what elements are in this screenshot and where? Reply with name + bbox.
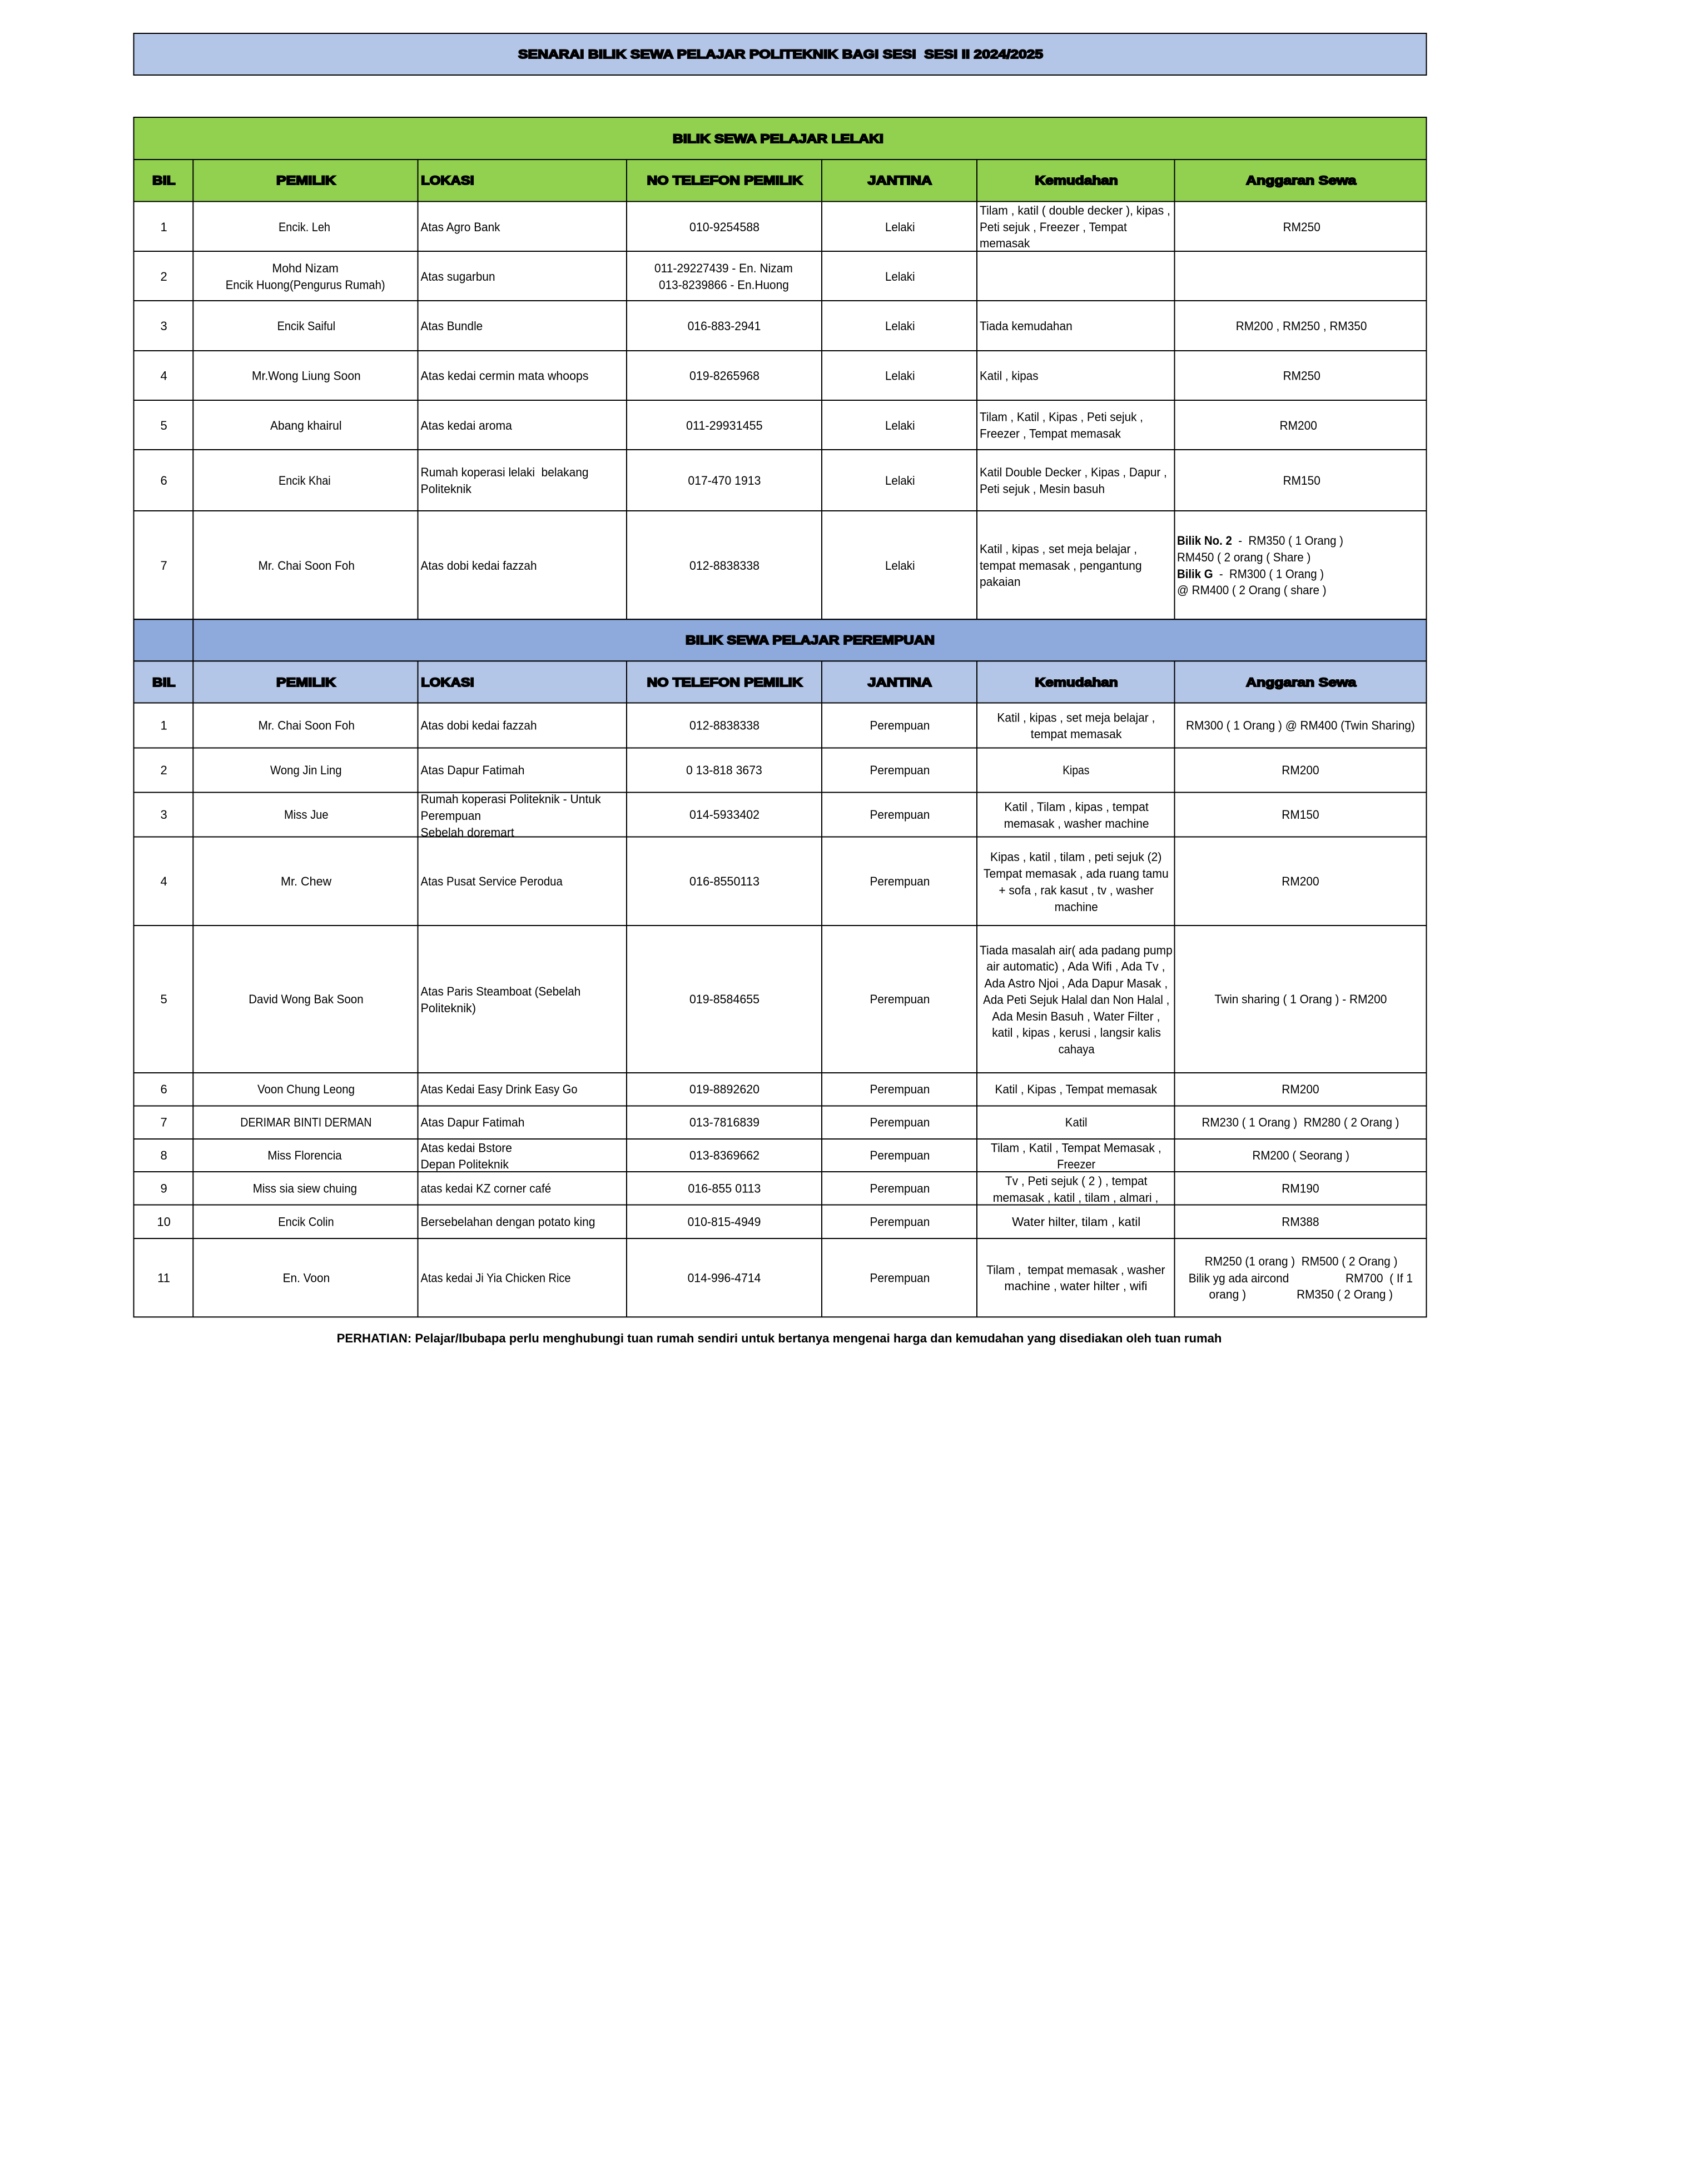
female table header row: Anggaran Sewa [1246, 675, 1357, 689]
female row 8: Depan Politeknik [420, 1157, 509, 1171]
female row 5: Perempuan [870, 992, 930, 1006]
male row 6 [133, 450, 1427, 511]
male row 7: Mr. Chai Soon Foh [259, 559, 355, 573]
female row 4: Perempuan [870, 874, 930, 888]
female row 3: Rumah koperasi Politeknik - Untuk [420, 792, 602, 806]
male row 7: Lelaki [885, 559, 915, 573]
female table header row: PEMILIK [276, 675, 336, 689]
male row 6: 017-470 1913 [688, 474, 761, 487]
female row 5: cahaya [1059, 1042, 1095, 1056]
female row 9: Miss sia siew chuing [253, 1182, 357, 1195]
female row 10: Perempuan [870, 1215, 930, 1228]
female row 2: Perempuan [870, 763, 930, 777]
female row 3: memasak , washer machine [1004, 817, 1149, 830]
male row 6: Peti sejuk , Mesin basuh [980, 482, 1105, 496]
female row 4: 016-8550113 [689, 874, 759, 888]
female row 10: Bersebelahan dengan potato king [420, 1215, 595, 1228]
male row 3: 3 [160, 319, 167, 333]
male row 2: 013-8239866 - En.Huong [659, 278, 789, 292]
heading: male section [133, 117, 1427, 160]
male row 3: RM200 , RM250 , RM350 [1236, 319, 1367, 333]
title [133, 33, 1427, 75]
female row 4: machine [1055, 900, 1098, 914]
female row 11: 11 [157, 1271, 170, 1285]
female table header row: NO TELEFON PEMILIK [647, 675, 803, 689]
male row 5: Freezer , Tempat memasak [980, 427, 1121, 440]
male row 7: 7 [160, 559, 167, 573]
female row 2: Kipas [1063, 763, 1089, 777]
male row 1: Tilam , katil ( double decker ), kipas , [980, 203, 1170, 217]
male row 2: Lelaki [885, 270, 915, 283]
male row 4 [133, 351, 1427, 400]
female table header row: BIL [152, 675, 176, 689]
female row 5: katil , kipas , kerusi , langsir kalis [992, 1026, 1161, 1039]
female row 5: 5 [160, 992, 167, 1006]
male row 1: Peti sejuk , Freezer , Tempat [980, 220, 1127, 234]
female row 5: air automatic) , Ada Wifi , Ada Tv , [986, 959, 1165, 973]
female row 4: 4 [160, 874, 167, 888]
panel: female student rooms table [133, 619, 1427, 1317]
male row 3 [133, 301, 1427, 351]
male row 5 [133, 400, 1427, 450]
male row 4: Mr.Wong Liung Soon [252, 369, 361, 382]
female row 4: Atas Pusat Service Perodua [420, 874, 563, 888]
male row 1: memasak [980, 236, 1030, 250]
male row 4: Lelaki [885, 369, 915, 382]
female row 8: 8 [160, 1148, 167, 1162]
female row 4 [133, 837, 1427, 926]
female row 10: Water hilter, tilam , katil [1012, 1215, 1140, 1228]
female row 1: 1 [160, 718, 167, 733]
female row 8: Freezer [1057, 1157, 1095, 1171]
title: SENARAI BILIK SEWA PELAJAR POLITEKNIK BAGI SESI SESI II 2024/2025 [518, 47, 1043, 61]
female row 2: 0 13-818 3673 [686, 763, 762, 777]
male table header row: Anggaran Sewa [1246, 173, 1357, 187]
female row 9 [133, 1172, 1427, 1205]
male row 5: Lelaki [885, 419, 915, 432]
female row 2: Atas Dapur Fatimah [420, 763, 524, 777]
female row 11: En. Voon [283, 1271, 330, 1285]
female row 1: Atas dobi kedai fazzah [420, 718, 537, 733]
female row 10: RM388 [1282, 1215, 1319, 1228]
male row 5: 011-29931455 [686, 419, 763, 432]
female row 4: + sofa , rak kasut , tv , washer [999, 883, 1154, 897]
male row 1: 1 [160, 220, 167, 234]
male row 2: 2 [160, 270, 167, 283]
male row 7: Bilik G - RM300 ( 1 Orang ) [1177, 567, 1324, 581]
female row 2: 2 [160, 763, 167, 777]
female row 3: Miss Jue [284, 808, 329, 822]
male table header row: BIL [152, 173, 176, 187]
female row 5: 019-8584655 [689, 992, 759, 1006]
male row 2: Mohd Nizam [272, 261, 339, 275]
male row 6: 6 [160, 474, 167, 487]
male row 5: 5 [160, 419, 167, 432]
female row 11: RM250 (1 orang ) RM500 ( 2 Orang ) [1205, 1254, 1398, 1268]
female row 6: 6 [160, 1082, 167, 1096]
footer note: PERHATIAN: Pelajar/Ibubapa perlu menghubungi tuan rumah sendiri untuk bertanya mengenai harga dan kemudahan yang disediakan oleh tuan rumah [337, 1331, 1222, 1345]
male row 5: Tilam , Katil , Kipas , Peti sejuk , [980, 410, 1143, 424]
female row 9: 016-855 0113 [688, 1182, 761, 1195]
female row 8: Tilam , Katil , Tempat Memasak , [991, 1141, 1161, 1155]
female row 7: Atas Dapur Fatimah [420, 1115, 524, 1130]
male row 7: tempat memasak , pengantung [980, 559, 1142, 573]
male row 4: 019-8265968 [689, 369, 759, 382]
female row 7: Perempuan [870, 1115, 930, 1130]
female row 7: Katil [1065, 1115, 1088, 1130]
female row 3: Katil , Tilam , kipas , tempat [1004, 800, 1149, 814]
female row 2 [133, 748, 1427, 793]
female row 5: Ada Astro Njoi , Ada Dapur Masak , [984, 976, 1168, 991]
female row 3: RM150 [1282, 808, 1319, 822]
female row 6: RM200 [1282, 1082, 1319, 1096]
female row 5: Twin sharing ( 1 Orang ) - RM200 [1214, 992, 1387, 1006]
female row 7: 7 [160, 1115, 167, 1130]
female row 11: machine , water hilter , wifi [1004, 1279, 1148, 1293]
heading: female section [133, 619, 1427, 661]
male row 3: 016-883-2941 [688, 319, 761, 333]
female row 3: Sebelah doremart [420, 825, 514, 839]
female table header row: JANTINA [868, 675, 932, 689]
female row 7 [133, 1106, 1427, 1139]
female row 10: 10 [157, 1215, 171, 1228]
male row 3: Tiada kemudahan [980, 319, 1073, 333]
female row 4: Tempat memasak , ada ruang tamu [984, 867, 1169, 880]
female row 7: DERIMAR BINTI DERMAN [240, 1115, 372, 1130]
female row 7: 013-7816839 [689, 1115, 759, 1130]
female table header row [133, 661, 1427, 703]
female row 9: RM190 [1282, 1182, 1319, 1195]
female row 4: Mr. Chew [281, 874, 331, 888]
female row 1: Katil , kipas , set meja belajar , [997, 710, 1155, 725]
male row 6: Lelaki [885, 474, 915, 487]
female row 3: 014-5933402 [689, 808, 759, 822]
female row 4: RM200 [1282, 874, 1319, 888]
female row 1: Perempuan [870, 718, 930, 733]
female row 5: David Wong Bak Soon [249, 992, 364, 1006]
male row 1: RM250 [1283, 220, 1320, 234]
male row 1: Atas Agro Bank [420, 220, 500, 234]
female row 6: Katil , Kipas , Tempat memasak [995, 1082, 1158, 1096]
female row 8: 013-8369662 [689, 1148, 759, 1162]
female row 8 [133, 1139, 1427, 1172]
female row 1: RM300 ( 1 Orang ) @ RM400 (Twin Sharing) [1186, 718, 1415, 733]
female row 9: Perempuan [870, 1182, 930, 1195]
male row 1: 010-9254588 [689, 220, 759, 234]
female row 5: Ada Mesin Basuh , Water Filter , [992, 1009, 1160, 1023]
female row 5: Atas Paris Steamboat (Sebelah [420, 984, 580, 998]
female row 5 [133, 926, 1427, 1073]
male row 2: Atas sugarbun [420, 270, 495, 283]
heading: male section: BILIK SEWA PELAJAR LELAKI [673, 132, 883, 146]
male row 7: Atas dobi kedai fazzah [420, 559, 537, 573]
male row 2: 011-29227439 - En. Nizam [654, 261, 793, 275]
female row 6 [133, 1073, 1427, 1106]
female row 11: 014-996-4714 [688, 1271, 761, 1285]
female row 9: 9 [160, 1182, 167, 1195]
female row 5: Ada Peti Sejuk Halal dan Non Halal , [983, 993, 1169, 1007]
female row 5: Tiada masalah air( ada padang pump [980, 943, 1173, 957]
female row 2: RM200 [1282, 763, 1319, 777]
male table header row: LOKASI [421, 173, 474, 187]
male row 5: Atas kedai aroma [420, 419, 513, 432]
female row 11: Tilam , tempat memasak , washer [986, 1263, 1165, 1277]
female row 11: orang ) [1209, 1287, 1246, 1301]
female row 11: RM350 ( 2 Orang ) [1297, 1287, 1393, 1301]
male row 6: Encik Khai [279, 474, 331, 487]
female row 6: Voon Chung Leong [257, 1082, 355, 1096]
male table header row: NO TELEFON PEMILIK [647, 173, 803, 187]
female row 11: Perempuan [870, 1271, 930, 1285]
female row 6: Atas Kedai Easy Drink Easy Go [420, 1082, 577, 1096]
female row 9: memasak , katil , tilam , almari , [993, 1191, 1158, 1205]
female row 9: atas kedai KZ corner café [420, 1182, 551, 1195]
female row 6: Perempuan [870, 1082, 930, 1096]
male row 5: Abang khairul [270, 419, 341, 432]
male row 7: pakaian [980, 575, 1021, 589]
female row 11: Atas kedai Ji Yia Chicken Rice [420, 1271, 570, 1285]
male table header row [133, 160, 1427, 201]
male row 2 [133, 251, 1427, 301]
male row 6: Katil Double Decker , Kipas , Dapur , [980, 465, 1167, 479]
female row 6: 019-8892620 [689, 1082, 759, 1096]
female row 8: Miss Florencia [267, 1148, 342, 1162]
female row 11 [133, 1238, 1427, 1317]
male row 3: Encik Saiful [277, 319, 335, 333]
male row 6: RM150 [1283, 474, 1320, 487]
male row 2: Encik Huong(Pengurus Rumah) [226, 278, 385, 292]
female row 2: Wong Jin Ling [270, 763, 341, 777]
female row 10 [133, 1205, 1427, 1238]
female row 4: Kipas , katil , tilam , peti sejuk (2) [990, 850, 1161, 864]
female row 8: Perempuan [870, 1148, 930, 1162]
male row 3: Atas Bundle [420, 319, 483, 333]
male table header row: PEMILIK [276, 173, 336, 187]
male row 7: 012-8838338 [689, 559, 759, 573]
female row 9: Tv , Peti sejuk ( 2 ) , tempat [1005, 1174, 1148, 1188]
female row 8: Atas kedai Bstore [420, 1141, 512, 1155]
female row 11: Bilik yg ada aircond [1189, 1271, 1289, 1285]
female row 5: Politeknik) [420, 1001, 476, 1015]
female row 11: RM700 ( If 1 [1346, 1271, 1413, 1285]
female row 10: Encik Colin [278, 1215, 334, 1228]
male row 4: 4 [160, 369, 167, 382]
male table header row: JANTINA [868, 173, 932, 187]
heading: female section: BILIK SEWA PELAJAR PEREMPUAN [686, 633, 935, 647]
male row 7: Bilik No. 2 - RM350 ( 1 Orang ) [1177, 534, 1343, 548]
male row 4: RM250 [1283, 369, 1320, 382]
male row 7: RM450 ( 2 orang ( Share ) [1177, 550, 1310, 564]
female table header row: Kemudahan [1035, 675, 1118, 689]
female row 3 [133, 792, 1427, 839]
female row 1: 012-8838338 [689, 718, 759, 733]
female row 3: 3 [160, 808, 167, 822]
female row 8: RM200 ( Seorang ) [1252, 1148, 1349, 1162]
male row 3: Lelaki [885, 319, 915, 333]
female row 10: 010-815-4949 [688, 1215, 761, 1228]
male row 5: RM200 [1280, 419, 1317, 432]
male row 6: Politeknik [420, 482, 472, 496]
panel: male student rooms table [133, 117, 1427, 619]
female row 1: Mr. Chai Soon Foh [259, 718, 355, 733]
male row 7 [133, 511, 1427, 619]
female table header row: LOKASI [421, 675, 474, 689]
female row 3: Perempuan [870, 808, 930, 822]
male row 7: @ RM400 ( 2 Orang ( share ) [1177, 583, 1327, 597]
male row 4: Atas kedai cermin mata whoops [420, 369, 588, 382]
male table header row: Kemudahan [1035, 173, 1118, 187]
male row 1: Lelaki [885, 220, 915, 234]
female row 3: Perempuan [420, 809, 481, 823]
female row 7: RM230 ( 1 Orang ) RM280 ( 2 Orang ) [1202, 1115, 1399, 1130]
male row 7: Katil , kipas , set meja belajar , [980, 542, 1137, 556]
male row 1: Encik. Leh [279, 220, 330, 234]
male row 6: Rumah koperasi lelaki belakang [420, 465, 588, 479]
male row 1 [133, 201, 1427, 251]
female row 1: tempat memasak [1031, 727, 1123, 741]
female row 1 [133, 703, 1427, 748]
male row 4: Katil , kipas [980, 369, 1039, 382]
